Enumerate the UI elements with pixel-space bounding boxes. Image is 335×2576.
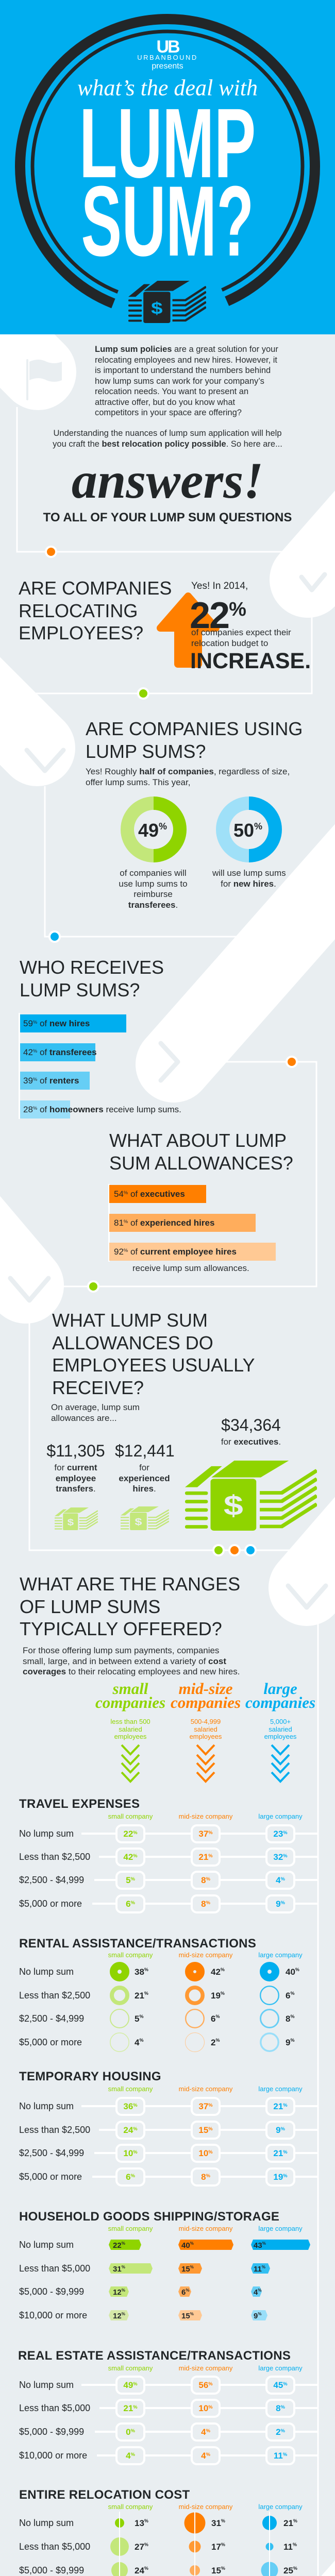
bar chart: allowances: 81% of experienced hires: [114, 1218, 214, 1228]
presents: presents: [152, 62, 183, 71]
hexagon bar chart: %: [190, 2241, 194, 2246]
table: household goods: large company: [258, 2225, 303, 2232]
heading: [19, 578, 172, 643]
table: temporary housing: 8%: [201, 2172, 210, 2182]
large companies: [245, 1680, 315, 1783]
table: rental assistance: $2,500 - $4,999: [19, 2013, 84, 2024]
ring chart: 2: [211, 2038, 215, 2047]
heading: WHAT LUMP SUM: [52, 1310, 208, 1331]
amount: experienced hires: hires.: [132, 1484, 156, 1494]
bubble chart: 15: [211, 2566, 221, 2575]
icon: orange up arrow: [157, 592, 220, 668]
table: temporary housing: small company: [108, 2085, 153, 2093]
text: Yes! Roughly half of companies, regardless of size,: [86, 767, 290, 776]
table: real estate: 10%: [198, 2403, 213, 2413]
bubble chart: %: [221, 2542, 225, 2547]
table: real estate: large company: [258, 2364, 303, 2372]
bar chart: recipients: 39% of renters: [23, 1076, 79, 1086]
icon: small money 2: [121, 1506, 169, 1530]
ring chart: [110, 1962, 299, 2052]
bubble chart: %: [221, 2518, 225, 2523]
hexagon bar chart: 43: [254, 2241, 262, 2250]
heading: [20, 957, 164, 1001]
table: real estate: $5,000 - $9,999: [19, 2427, 84, 2437]
bubble chart: %: [293, 2566, 297, 2571]
intro text 2: Understanding the nuances of lump sum application will help: [53, 429, 281, 438]
table: real estate: 4%: [126, 2451, 135, 2461]
heading: TYPICALLY OFFERED?: [20, 1618, 222, 1639]
bubble chart: 13: [135, 2518, 144, 2528]
stat 22%: [190, 581, 311, 673]
hexagon bar chart: %: [122, 2241, 125, 2246]
table: travel expenses: 9%: [276, 1899, 285, 1909]
caption 49: transferees.: [128, 900, 178, 910]
ring chart: %: [290, 1991, 294, 1996]
table: household goods: Less than $5,000: [19, 2263, 90, 2274]
table: rental assistance: large company: [258, 1951, 303, 1959]
heading: [20, 1573, 240, 1639]
ring chart: %: [215, 2014, 220, 2019]
intro text: [23, 1646, 240, 1676]
table: travel expenses: mid-size company: [179, 1812, 232, 1820]
bar chart: recipients: [19, 1013, 181, 1119]
hexagon bar chart: 4: [254, 2288, 258, 2297]
amount: experienced hires: for: [139, 1463, 149, 1472]
table: temporary housing: 24%: [123, 2125, 138, 2135]
table: household goods: $5,000 - $9,999: [19, 2286, 84, 2297]
table: real estate: 11%: [274, 2451, 287, 2461]
table: entire relocation cost: mid-size company: [179, 2503, 232, 2511]
intro text: relocating employees and new hires. However, it: [95, 355, 277, 365]
intro text: For those offering lump sum payments, companies: [23, 1646, 219, 1655]
bar chart: allowances: [108, 1184, 276, 1262]
hexagon bar chart: 22: [113, 2241, 122, 2250]
icon: big money: $: [224, 1490, 243, 1521]
table: travel expenses: $5,000 or more: [19, 1899, 82, 1909]
table: real estate: 45%: [273, 2380, 288, 2390]
heading: EMPLOYEES USUALLY: [52, 1354, 255, 1376]
intro text: competitors in your space are offering?: [95, 408, 242, 417]
ring chart: %: [144, 1991, 148, 1996]
small companies: less than 500: [110, 1718, 150, 1725]
bubble chart: %: [293, 2542, 297, 2547]
table: travel expenses: 4%: [276, 1875, 285, 1885]
heading: ARE COMPANIES USING: [86, 718, 303, 739]
hexagon bar chart: %: [190, 2265, 194, 2269]
table: household goods: [0, 2210, 335, 2324]
table: travel expenses: 5%: [126, 1875, 135, 1885]
table: real estate: 0%: [126, 2427, 135, 2437]
table: real estate: $10,000 or more: [19, 2450, 87, 2461]
ring chart: %: [295, 1967, 299, 1972]
ring chart: %: [144, 1967, 148, 1972]
heading: ENTIRE RELOCATION COST: [19, 2488, 190, 2502]
table: real estate: [0, 2349, 335, 2468]
table: rental assistance: $5,000 or more: [19, 2037, 82, 2047]
section: ranges heading: [20, 1573, 240, 1676]
answers heading: answers!: [72, 452, 263, 509]
stat 22%: of companies expect their: [191, 628, 291, 637]
table: travel expenses: 8%: [201, 1899, 210, 1909]
table: travel expenses: 6%: [126, 1899, 135, 1909]
bar chart: allowances: 92% of current employee hires: [114, 1247, 237, 1257]
heading: OF LUMP SUMS: [20, 1596, 160, 1617]
icon: small money 2: $: [135, 1516, 142, 1527]
heading: RENTAL ASSISTANCE/TRANSACTIONS: [19, 1937, 256, 1951]
small companies: salaried: [119, 1725, 142, 1733]
ring chart: 9: [286, 2038, 290, 2047]
hexagon bar chart: %: [262, 2241, 266, 2246]
table: travel expenses: 32%: [273, 1852, 288, 1862]
icon: money stack: [128, 281, 206, 323]
small companies: employees: [114, 1733, 146, 1740]
subheading: TO ALL OF YOUR LUMP SUM QUESTIONS: [43, 511, 292, 524]
caption: receive lump sum allowances.: [132, 1263, 249, 1273]
table: temporary housing: 9%: [276, 2125, 285, 2135]
hexagon bar chart: [0, 2210, 335, 2324]
donut: 49%: 49: [138, 820, 159, 841]
bubble chart: [0, 2488, 335, 2576]
table: rental assistance: [19, 1937, 303, 2052]
heading: WHO RECEIVES: [20, 957, 164, 978]
heading: WHAT ABOUT LUMP: [109, 1130, 287, 1151]
text: allowances are...: [51, 1413, 117, 1423]
section: who receives: [19, 957, 181, 1119]
mid-size companies: mid-size: [178, 1680, 233, 1698]
table: temporary housing: [19, 2070, 317, 2187]
donut: 50%: %: [254, 821, 262, 832]
ring chart: 40: [286, 1967, 295, 1977]
table: real estate: 4%: [201, 2451, 210, 2461]
bubble chart: 25: [283, 2566, 293, 2575]
stat 22%: relocation budget to: [191, 638, 268, 648]
bubble chart: %: [221, 2566, 225, 2571]
table: household goods: small company: [108, 2225, 153, 2232]
ring chart: 42: [211, 1967, 221, 1977]
ring chart: 38: [135, 1967, 144, 1977]
bar chart: recipients: 28% of homeowners receive lump sums.: [23, 1105, 181, 1114]
donut: 49%: [121, 796, 187, 862]
intro text: is important to understand the numbers behind: [95, 366, 271, 375]
brand name: URBANBOUND: [137, 54, 198, 61]
heading: [86, 718, 303, 761]
table: temporary housing: 36%: [123, 2102, 138, 2111]
small companies: companies: [95, 1693, 165, 1711]
large companies: salaried: [269, 1725, 292, 1733]
logo: UrbanBound: UB: [156, 37, 179, 57]
ring chart: 6: [286, 1991, 290, 2001]
table: travel expenses: 37%: [198, 1829, 213, 1839]
heading: LUMP SUMS?: [20, 979, 140, 1001]
table: entire relocation cost: large company: [258, 2503, 303, 2511]
intro text: coverages to their relocating employees and new hires.: [23, 1667, 240, 1676]
table: real estate: No lump sum: [19, 2380, 74, 2390]
ring chart: 4: [135, 2038, 139, 2047]
table: entire relocation cost: Less than $5,000: [19, 2541, 90, 2552]
stat 22%: 22%: [190, 595, 245, 636]
ring chart: 8: [286, 2014, 290, 2024]
hexagon bar chart: 9: [254, 2312, 258, 2320]
table: temporary housing: 10%: [123, 2148, 138, 2158]
title SUM?: SUM?: [81, 165, 254, 277]
stat 22%: Yes! In 2014,: [191, 581, 248, 591]
small companies: [95, 1680, 165, 1783]
table: household goods: $10,000 or more: [19, 2310, 87, 2320]
hexagon bar chart: 11: [254, 2265, 262, 2274]
table: travel expenses: 8%: [201, 1875, 210, 1885]
large companies: 5,000+: [270, 1718, 291, 1725]
table: rental assistance: small company: [108, 1951, 153, 1959]
bubble chart: 31: [211, 2518, 221, 2528]
heading: LUMP SUMS?: [86, 741, 206, 761]
donut: 49%: %: [159, 821, 167, 832]
amount: transfers: transfers.: [56, 1484, 96, 1494]
bubble chart: 21: [283, 2518, 293, 2528]
table: real estate: 8%: [276, 2403, 285, 2413]
table: real estate: 2%: [276, 2427, 285, 2437]
text: [51, 1402, 140, 1423]
table: household goods: mid-size company: [179, 2225, 232, 2232]
section: usual amounts: [46, 1310, 317, 1531]
ring chart: %: [221, 1991, 225, 1996]
intro text 2: [53, 429, 282, 449]
amount: transfers: for current: [54, 1463, 97, 1472]
section: allowances: [108, 1130, 293, 1273]
bubble chart: 11: [283, 2542, 293, 2552]
stat 22%: INCREASE.: [190, 649, 311, 673]
subtitle script: what’s the deal with: [77, 75, 258, 100]
company size legend: [95, 1680, 315, 1783]
amount: experienced hires: $12,441: [115, 1442, 175, 1460]
table: entire relocation cost: [0, 2488, 335, 2576]
table: rental assistance: mid-size company: [179, 1951, 232, 1959]
ring chart: %: [139, 2038, 143, 2043]
ring chart: %: [221, 1967, 225, 1972]
table: temporary housing: 37%: [198, 2102, 213, 2111]
bubble chart: 27: [135, 2542, 144, 2552]
hexagon bar chart: 15: [181, 2312, 190, 2320]
large companies: employees: [264, 1733, 296, 1740]
table: entire relocation cost: small company: [108, 2503, 153, 2511]
heading: ALLOWANCES DO: [52, 1332, 213, 1353]
text: On average, lump sum: [51, 1402, 140, 1412]
table: travel expenses: Less than $2,500: [19, 1852, 90, 1862]
mid-size companies: 500-4,999: [191, 1718, 221, 1725]
heading: WHAT ARE THE RANGES: [20, 1573, 240, 1595]
intro text: relocation needs. You want to present an: [95, 387, 248, 396]
hexagon bar chart: %: [258, 2288, 261, 2293]
intro text: [95, 345, 278, 417]
intro text: attractive offer, but do you know what: [95, 398, 235, 407]
ring chart: 6: [211, 2014, 215, 2024]
caption 49: [119, 868, 188, 910]
section: relocating employees: [19, 578, 311, 673]
bubble chart: %: [144, 2566, 148, 2571]
hexagon bar chart: %: [258, 2312, 261, 2316]
hexagon bar chart: 6: [181, 2288, 186, 2297]
amount: experienced hires: [115, 1442, 175, 1494]
table: travel expenses: large company: [258, 1812, 303, 1820]
hexagon bar chart: 31: [113, 2265, 122, 2274]
mid-size companies: companies: [171, 1693, 241, 1711]
hexagon bar chart: %: [186, 2288, 189, 2293]
table: entire relocation cost: No lump sum: [19, 2518, 74, 2528]
donut: 50%: 50: [233, 820, 254, 841]
table: temporary housing: 21%: [273, 2148, 288, 2158]
amount: executives: $34,364: [221, 1416, 281, 1434]
table: real estate: 56%: [198, 2380, 213, 2390]
table: travel expenses: 22%: [123, 1829, 138, 1839]
heading: EMPLOYEES?: [19, 622, 143, 643]
intro text: Lump sum policies are a great solution for your: [95, 345, 278, 354]
hexagon bar chart: 12: [113, 2288, 122, 2297]
table: temporary housing: $2,500 - $4,999: [19, 2148, 84, 2158]
heading: ARE COMPANIES: [19, 578, 172, 599]
title ring: [15, 14, 320, 308]
table: temporary housing: 6%: [126, 2172, 135, 2182]
ring chart: 19: [211, 1991, 221, 2001]
hexagon bar chart: %: [190, 2312, 194, 2316]
large companies: companies: [245, 1693, 315, 1711]
ring chart: 5: [135, 2014, 139, 2024]
table: temporary housing: 15%: [198, 2125, 213, 2135]
caption 49: reimburse: [133, 889, 173, 899]
heading: SUM ALLOWANCES?: [109, 1152, 293, 1174]
icon: small money 1: [55, 1507, 98, 1530]
heading: RECEIVE?: [52, 1377, 144, 1398]
table: travel expenses: 42%: [123, 1852, 138, 1862]
table: real estate: mid-size company: [179, 2364, 232, 2372]
table: temporary housing: 19%: [273, 2172, 288, 2182]
mid-size companies: salaried: [194, 1725, 217, 1733]
hexagon bar chart: 12: [113, 2312, 122, 2320]
hexagon bar chart: %: [122, 2312, 125, 2316]
table: entire relocation cost: $5,000 - $9,999: [19, 2565, 84, 2575]
bar chart: recipients: 42% of transferees: [23, 1047, 97, 1057]
table: temporary housing: 10%: [198, 2148, 213, 2158]
section: using lump sums: [86, 718, 303, 910]
mid-size companies: employees: [190, 1733, 222, 1740]
table: rental assistance: Less than $2,500: [19, 1990, 90, 2001]
table: temporary housing: No lump sum: [19, 2101, 74, 2111]
amount: transfers: $11,305: [46, 1442, 105, 1460]
donut: 50%: [216, 796, 282, 862]
table: travel expenses: [19, 1797, 317, 1913]
ring chart: 21: [135, 1991, 144, 2001]
bubble chart: %: [293, 2518, 297, 2523]
large companies: large: [263, 1680, 297, 1698]
small companies: small: [113, 1680, 148, 1698]
heading: TRAVEL EXPENSES: [19, 1797, 140, 1811]
table: travel expenses: $2,500 - $4,999: [19, 1875, 84, 1885]
table: temporary housing: large company: [258, 2085, 303, 2093]
icon: small money 1: $: [68, 1517, 74, 1528]
text: offer lump sums. This year,: [86, 777, 190, 787]
table: travel expenses: 21%: [198, 1852, 213, 1862]
caption 50: will use lump sums: [212, 868, 286, 878]
caption 49: of companies will: [120, 868, 187, 878]
table: travel expenses: No lump sum: [19, 1828, 74, 1839]
table: temporary housing: $5,000 or more: [19, 2172, 82, 2182]
caption 50: for new hires.: [221, 879, 276, 889]
table: real estate: 21%: [123, 2403, 138, 2413]
ring chart: %: [215, 2038, 220, 2043]
table: temporary housing: 21%: [273, 2102, 288, 2111]
table: temporary housing: Less than $2,500: [19, 2125, 90, 2135]
amount: executives: [221, 1416, 281, 1447]
intro text: small, large, and in between extend a variety of cost: [23, 1656, 226, 1666]
bar chart: recipients: 59% of new hires: [23, 1019, 90, 1028]
table: real estate: small company: [108, 2364, 153, 2372]
bar chart: allowances: 54% of executives: [114, 1189, 185, 1199]
bubble chart: 17: [211, 2542, 221, 2552]
table: household goods: No lump sum: [19, 2240, 74, 2250]
table: rental assistance: No lump sum: [19, 1967, 74, 1977]
title LUMP: LUMP: [79, 88, 256, 198]
ring chart: %: [139, 2014, 143, 2019]
hexagon bar chart: %: [122, 2288, 125, 2293]
bubble chart: %: [144, 2542, 148, 2547]
amount: transfers: [46, 1442, 105, 1494]
heading: HOUSEHOLD GOODS SHIPPING/STORAGE: [19, 2210, 279, 2224]
heading: [109, 1130, 293, 1174]
ring chart: %: [290, 2038, 294, 2043]
hexagon bar chart: %: [262, 2265, 265, 2269]
ring chart: %: [290, 2014, 294, 2019]
hexagon bar chart: %: [122, 2265, 125, 2269]
intro text 2: you craft the best relocation policy possible. So here are...: [53, 439, 282, 449]
table: travel expenses: small company: [108, 1812, 153, 1820]
table: real estate: 49%: [123, 2380, 138, 2390]
table: temporary housing: mid-size company: [179, 2085, 232, 2093]
intro text: how lump sums can work for your company’s: [95, 376, 264, 385]
amount: executives: for executives.: [221, 1437, 281, 1447]
table: real estate: 4%: [201, 2427, 210, 2437]
hexagon bar chart: 40: [181, 2241, 190, 2250]
icon: money stack: $: [151, 298, 163, 317]
hexagon bar chart: 15: [181, 2265, 190, 2274]
heading: RELOCATING: [19, 600, 138, 621]
heading: [52, 1310, 255, 1398]
table: travel expenses: 23%: [273, 1829, 288, 1839]
bubble chart: %: [144, 2518, 148, 2523]
bubble chart: 24: [135, 2566, 144, 2575]
header panel: [0, 0, 335, 334]
mid-size companies: [171, 1680, 241, 1783]
text: [86, 767, 290, 787]
amount: experienced hires: experienced: [119, 1473, 170, 1483]
icon: big money: [185, 1461, 317, 1531]
heading: REAL ESTATE ASSISTANCE/TRANSACTIONS: [18, 2349, 291, 2363]
table: real estate: Less than $5,000: [19, 2403, 90, 2413]
amount: transfers: employee: [56, 1473, 96, 1483]
caption 49: use lump sums to: [119, 879, 188, 889]
heading: TEMPORARY HOUSING: [19, 2070, 161, 2083]
caption 50: [212, 868, 286, 889]
